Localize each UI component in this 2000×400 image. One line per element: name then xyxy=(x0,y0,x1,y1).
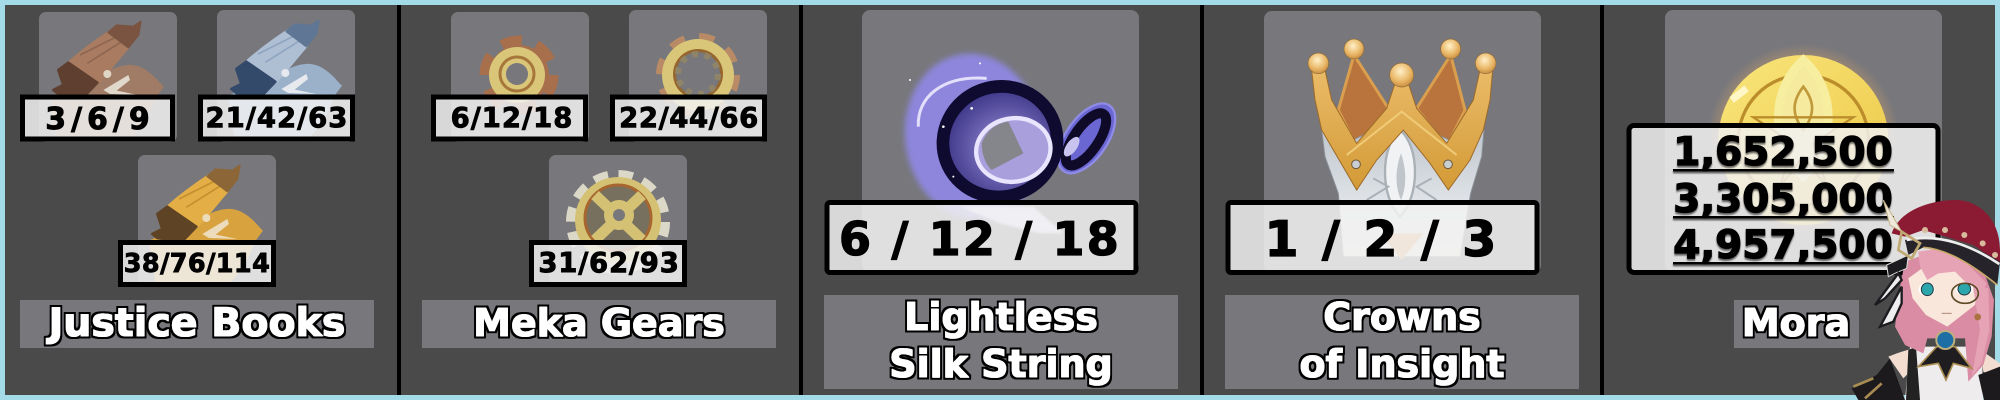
card: silk string xyxy=(862,10,1139,272)
count: 6 / 12 / 18: 6 / 12 / 18 xyxy=(839,212,1121,266)
count: 31/62/93: 31/62/93 xyxy=(538,247,680,279)
count: 21/42/63: 21/42/63 xyxy=(206,102,348,134)
divider xyxy=(397,5,401,395)
count: 3/6/9: 3/6/9 xyxy=(45,102,155,137)
eye right xyxy=(1955,283,1973,295)
panel: Lightless Silk String xyxy=(824,10,1178,389)
panel: Justice Books xyxy=(20,10,374,348)
divider xyxy=(799,5,803,395)
gold ornament xyxy=(1898,232,1920,258)
heading: Mora: Mora xyxy=(1742,301,1850,345)
earring xyxy=(1974,314,1981,320)
strap xyxy=(1906,347,1920,400)
divider xyxy=(1200,5,1204,395)
hat band and visor xyxy=(1905,237,2000,285)
card: copper gear xyxy=(451,12,589,142)
card: crown xyxy=(1264,11,1541,273)
heading: Meka Gears: Meka Gears xyxy=(473,301,725,345)
card: bronze gear xyxy=(629,10,767,142)
feather xyxy=(1883,200,1902,232)
count: Mora amounts: 1,652,500 xyxy=(1673,130,1893,175)
count: 3/6/9 xyxy=(22,97,172,139)
left sleeve xyxy=(1852,358,1905,400)
tie xyxy=(1918,347,1972,380)
heading: Lightless Silk String: Silk String xyxy=(889,342,1113,386)
mouth xyxy=(1942,312,1952,315)
eye left xyxy=(1919,282,1935,296)
card: mora coin xyxy=(1665,10,1942,272)
shirt xyxy=(1905,347,1983,400)
heading: Crowns of Insight xyxy=(1225,295,1579,389)
heading: Justice Books: Justice Books xyxy=(46,300,345,346)
count: 1 / 2 / 3 xyxy=(1228,202,1537,272)
heading: Crowns of Insight: Crowns xyxy=(1323,295,1481,339)
heading: Meka Gears xyxy=(422,300,776,348)
beret studs xyxy=(1922,227,1998,258)
panel: Mora xyxy=(1629,10,1942,348)
card: gold book xyxy=(138,155,276,287)
count: 22/44/66: 22/44/66 xyxy=(619,102,759,134)
count: 1 / 2 / 3: 1 / 2 / 3 xyxy=(1264,211,1500,268)
monocle xyxy=(1952,283,1978,303)
brooch xyxy=(1936,331,1954,349)
card: golden gear xyxy=(549,155,687,287)
count: Mora amounts: 4,957,500 xyxy=(1673,223,1893,268)
face xyxy=(1908,255,1978,327)
panel: Crowns of Insight xyxy=(1225,11,1579,389)
ribbon xyxy=(1887,255,1908,277)
divider xyxy=(1600,5,1604,395)
shoulders xyxy=(1888,347,1917,378)
count: Mora amounts: 3,305,000 xyxy=(1673,177,1893,222)
count: 6/12/18: 6/12/18 xyxy=(451,102,573,134)
count: 6/12/18 xyxy=(434,97,586,139)
count: 38/76/114 xyxy=(120,242,274,284)
character mascot xyxy=(1852,200,2000,400)
card: blue book xyxy=(217,10,355,142)
heading: Crowns of Insight: of Insight xyxy=(1299,342,1505,386)
right jacket xyxy=(1978,367,2000,400)
card: brown book xyxy=(39,12,177,142)
back hair xyxy=(1895,247,1994,382)
count: 38/76/114: 38/76/114 xyxy=(124,249,270,279)
bangs xyxy=(1918,247,1987,297)
heading: Lightless Silk String: Lightless xyxy=(904,295,1098,339)
heading: Lightless Silk String xyxy=(824,295,1178,389)
beret xyxy=(1892,200,2000,263)
panel: Meka Gears xyxy=(422,10,776,348)
count: Mora amounts xyxy=(1629,126,1938,272)
